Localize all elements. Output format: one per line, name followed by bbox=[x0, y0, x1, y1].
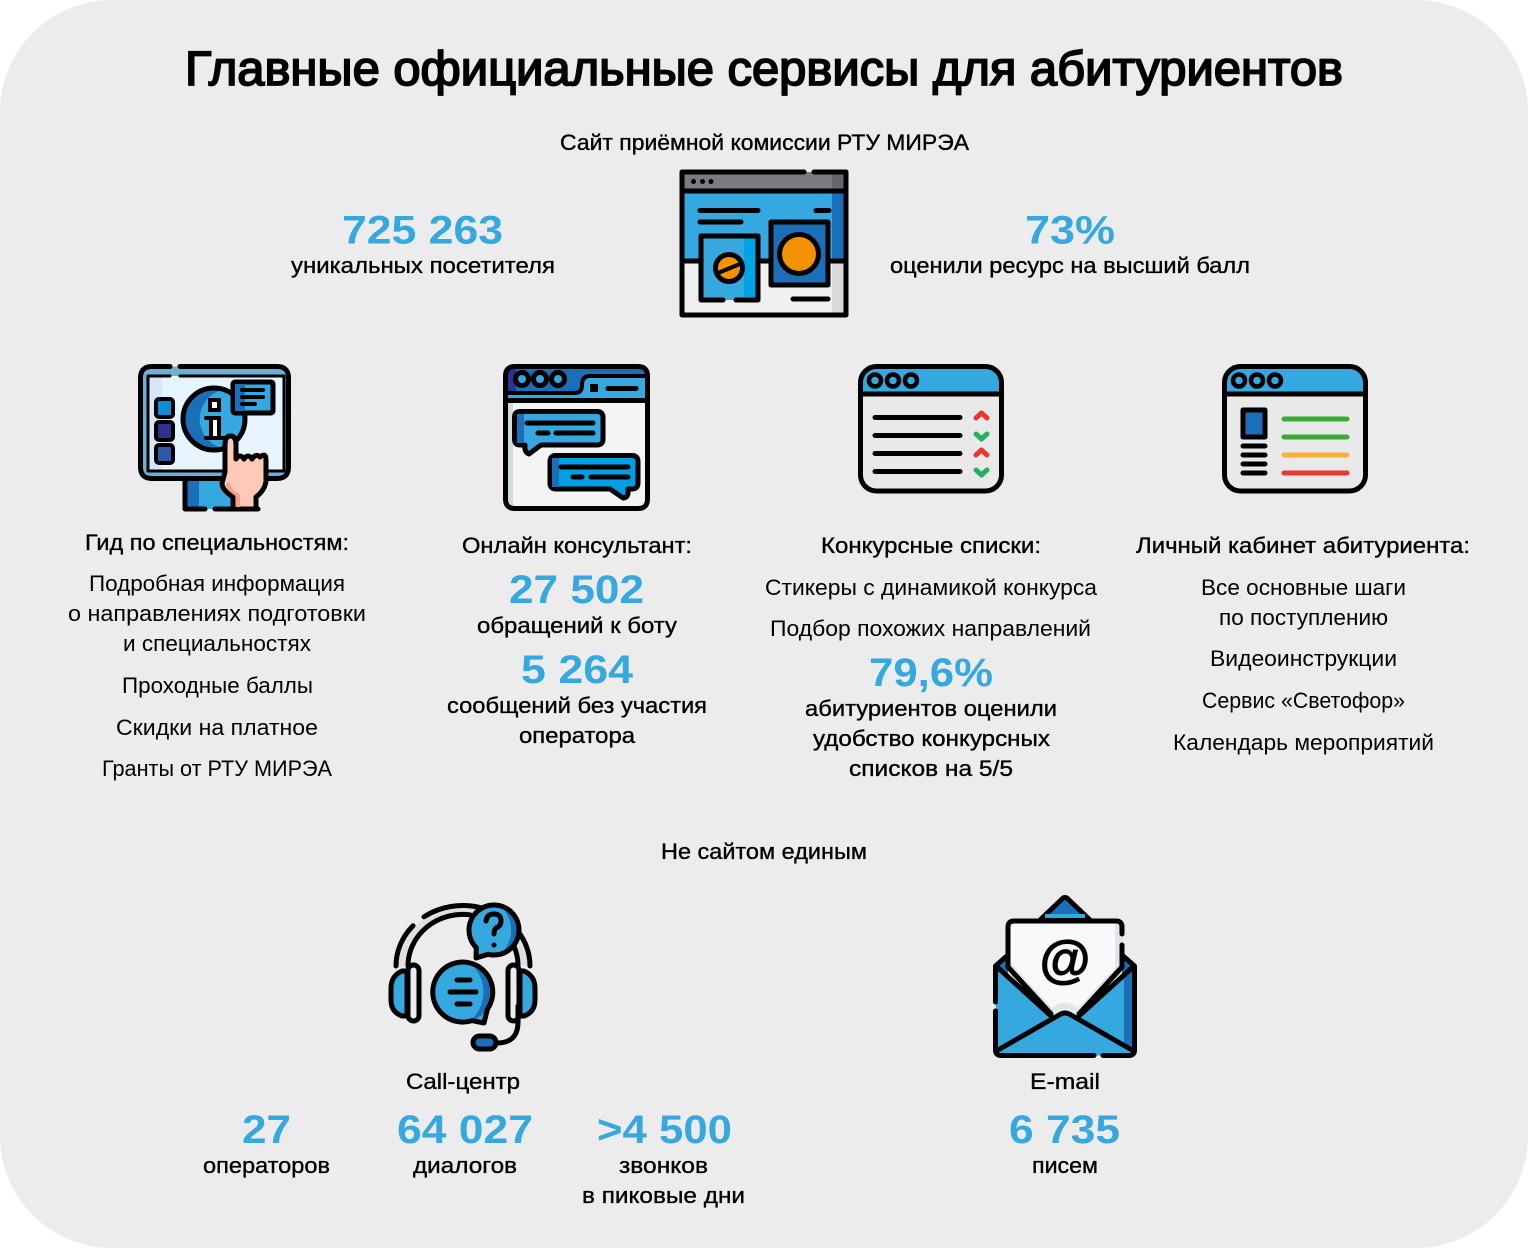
stat: messages without operator bbox=[447, 648, 707, 748]
stat: convenience rating: абитуриентов оценили bbox=[805, 696, 1057, 721]
stat: messages without operator: 5 264 bbox=[521, 648, 634, 692]
text: competition lists features: Подбор похожих направлений bbox=[770, 616, 1091, 641]
stat: operators: 27 bbox=[242, 1108, 291, 1152]
text: applicant account list bbox=[1173, 575, 1434, 755]
panel: competition lists bbox=[765, 366, 1098, 781]
text: specialties guide list: о направлениях подготовки bbox=[68, 601, 366, 626]
icon: open envelope with letter bbox=[996, 898, 1134, 1056]
stat: operators bbox=[203, 1108, 330, 1178]
panel: email bbox=[996, 898, 1134, 1178]
stat: top rating: 73% bbox=[1025, 208, 1115, 252]
icon: window with ranked list bbox=[860, 366, 1002, 491]
stat: peak-day calls: >4 500 bbox=[597, 1108, 732, 1152]
stat: convenience rating: списков на 5/5 bbox=[849, 756, 1013, 781]
stat: peak-day calls: в пиковые дни bbox=[582, 1183, 745, 1208]
panel: specialties guide bbox=[68, 366, 366, 781]
stat: messages without operator: оператора bbox=[519, 723, 636, 748]
stat: top rating: оценили ресурс на высший балл bbox=[890, 253, 1250, 278]
stat: dialogs: диалогов bbox=[413, 1153, 517, 1178]
text: specialties guide list: Подробная информация bbox=[89, 571, 345, 596]
text: specialties guide list: Скидки на платное bbox=[116, 715, 318, 740]
title: Главные официальные сервисы для абитуриентов bbox=[185, 43, 1343, 96]
text: specialties guide list: и специальностях bbox=[123, 631, 311, 656]
stat: peak-day calls bbox=[582, 1108, 745, 1208]
heading: applicant account: Личный кабинет абитуриента: bbox=[1136, 533, 1470, 558]
stat: letters: 6 735 bbox=[1009, 1108, 1120, 1152]
icon: window with profile and status lines bbox=[1224, 366, 1366, 491]
text: specialties guide list bbox=[68, 571, 366, 781]
text: competition lists features: Стикеры с динамикой конкурса bbox=[765, 575, 1098, 600]
label: call centre: Call-центр bbox=[406, 1069, 520, 1094]
stat: convenience rating: 79,6% bbox=[869, 651, 993, 695]
text: specialties guide list: Проходные баллы bbox=[122, 673, 313, 698]
stat: messages without operator: сообщений без участия bbox=[447, 693, 707, 718]
label: email: E-mail bbox=[1030, 1069, 1100, 1094]
stat: convenience rating bbox=[805, 651, 1057, 781]
text: applicant account list: Календарь мероприятий bbox=[1173, 730, 1434, 755]
text: applicant account list: по поступлению bbox=[1219, 605, 1388, 630]
stat: dialogs: 64 027 bbox=[397, 1108, 533, 1152]
stat: unique visitors: уникальных посетителя bbox=[291, 253, 555, 278]
icon: open envelope with letter: @ bbox=[1040, 931, 1090, 989]
heading: beyond the website: Не сайтом единым bbox=[661, 839, 867, 864]
text: applicant account list: Сервис «Светофор» bbox=[1202, 688, 1405, 713]
stat: operators: операторов bbox=[203, 1153, 330, 1178]
stat: bot requests: 27 502 bbox=[509, 568, 644, 612]
stat: top rating bbox=[890, 208, 1250, 278]
stat: bot requests bbox=[477, 568, 677, 638]
heading: online consultant: Онлайн консультант: bbox=[462, 533, 692, 558]
panel: applicant account bbox=[1136, 366, 1470, 755]
icon: monitor with info and pointing hand bbox=[140, 366, 288, 509]
heading: competition lists: Конкурсные списки: bbox=[821, 533, 1041, 558]
stat: peak-day calls: звонков bbox=[619, 1153, 708, 1178]
text: applicant account list: Видеоинструкции bbox=[1210, 646, 1397, 671]
icon: website window bbox=[682, 172, 846, 315]
stat: letters: писем bbox=[1032, 1153, 1098, 1178]
text: applicant account list: Все основные шаги bbox=[1201, 575, 1406, 600]
stat: letters bbox=[1009, 1108, 1120, 1178]
stat: unique visitors: 725 263 bbox=[342, 208, 503, 252]
panel: call centre bbox=[203, 905, 745, 1208]
text: competition lists features bbox=[765, 575, 1098, 641]
stat: bot requests: обращений к боту bbox=[477, 613, 677, 638]
panel: online consultant bbox=[447, 366, 707, 748]
stat: convenience rating: удобство конкурсных bbox=[813, 726, 1050, 751]
stat: unique visitors bbox=[291, 208, 555, 278]
heading: specialties guide: Гид по специальностям: bbox=[85, 530, 349, 555]
text: specialties guide list: Гранты от РТУ МИРЭА bbox=[102, 756, 332, 781]
stat: dialogs bbox=[397, 1108, 533, 1178]
panel: admissions website bbox=[291, 130, 1250, 315]
icon: browser with chat bubbles bbox=[506, 366, 648, 508]
heading: admissions website: Сайт приёмной комиссии РТУ МИРЭА bbox=[560, 130, 969, 155]
icon: headset with speech bubbles bbox=[391, 905, 535, 1049]
